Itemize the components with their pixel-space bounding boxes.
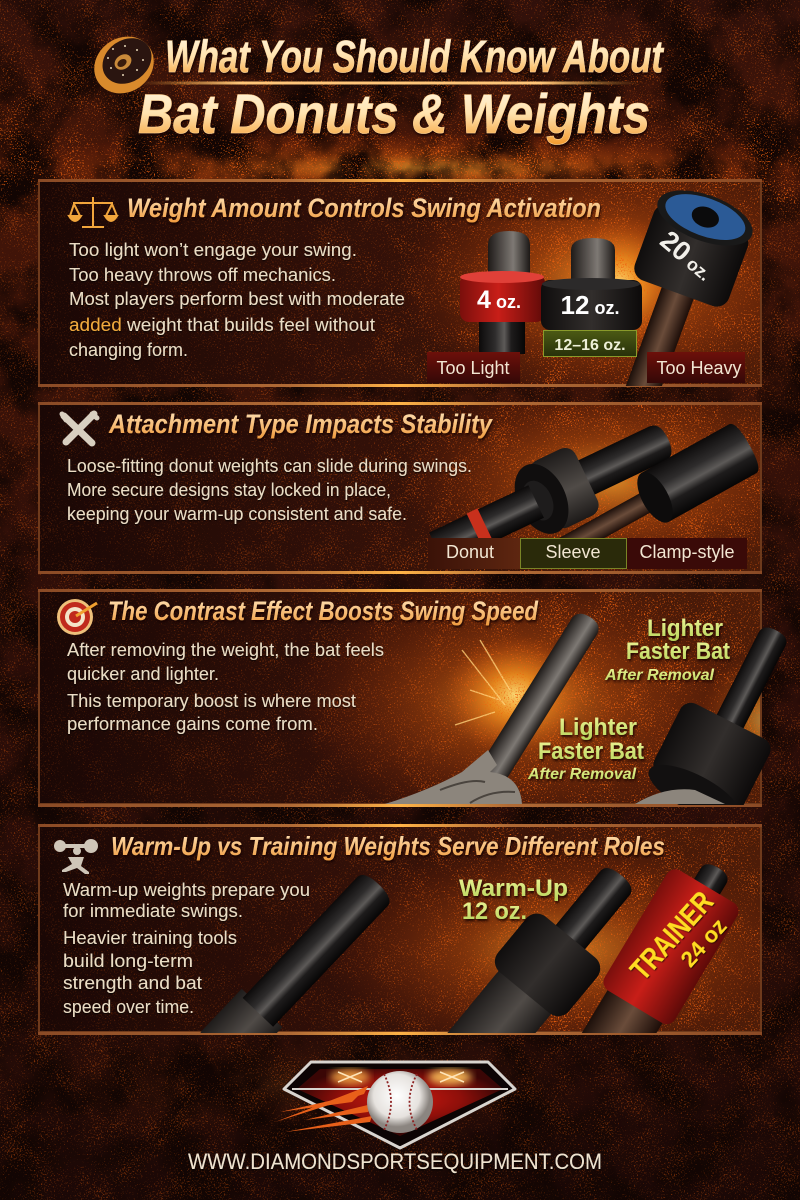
callout: lighter faster bat lower: Faster Bat xyxy=(538,738,644,765)
label: clamp-style: Clamp-style xyxy=(639,542,735,562)
panel: warm-up vs training xyxy=(38,824,762,1035)
body text: changing form. xyxy=(69,340,188,360)
icon: wrench and screwdriver xyxy=(62,414,97,443)
bat: 12 oz xyxy=(541,238,642,330)
heading: Warm-Up vs Training Weights Serve Different Roles xyxy=(111,831,665,861)
callout: lighter faster bat lower: Lighter xyxy=(559,714,637,741)
title line 1: What You Should Know About xyxy=(165,31,665,82)
bat: plain sleeve xyxy=(200,875,390,1033)
label: warm-up 12 oz: 12 oz. xyxy=(462,898,527,925)
heading: Weight Amount Controls Swing Activation xyxy=(127,193,601,223)
body text: performance gains come from. xyxy=(67,714,318,734)
label: too light: Too Light xyxy=(436,358,510,378)
body text: Loose-fitting donut weights can slide during swings. xyxy=(67,456,472,476)
panel: contrast effect xyxy=(38,589,786,807)
body text: speed over time. xyxy=(63,997,194,1017)
body text: Heavier training tools xyxy=(63,928,237,948)
callout: lighter faster bat lower xyxy=(527,714,644,783)
label: too heavy xyxy=(647,352,745,383)
bat: 12 oz: 12 oz. xyxy=(561,290,619,320)
icon: target xyxy=(57,599,97,635)
label: donut xyxy=(428,538,520,569)
body text xyxy=(67,640,384,734)
bat: 4 oz: 4 oz. xyxy=(477,286,521,314)
body text xyxy=(69,240,405,360)
body text: Warm-up weights prepare you xyxy=(63,880,310,900)
bat: trainer: 24 oz xyxy=(676,913,732,972)
label: warm-up 12 oz: Warm-Up xyxy=(459,875,568,902)
body text: More secure designs stay locked in place, xyxy=(67,480,391,500)
label: too heavy: Too Heavy xyxy=(656,358,742,378)
icon: donut xyxy=(83,25,165,105)
title block xyxy=(83,25,665,145)
body text: Too light won’t engage your swing. xyxy=(69,240,357,260)
bat: trainer: TRAINER xyxy=(624,885,720,987)
bat: 20 oz: 20 oz. xyxy=(654,225,720,286)
label: warm-up 12 oz xyxy=(459,875,568,925)
icon: weightlifter xyxy=(54,839,98,874)
bat: sleeve attachment xyxy=(559,424,758,538)
bat: donut with glove xyxy=(635,628,786,805)
bat: donut attachment xyxy=(429,426,672,538)
logo: diamond with baseball xyxy=(275,1062,515,1148)
footer url: WWW.DIAMONDSPORTSEQUIPMENT.COM xyxy=(188,1149,602,1174)
title underline xyxy=(140,82,640,84)
callout: lighter faster bat lower: After Removal xyxy=(527,766,637,783)
body text: keeping your warm-up consistent and safe. xyxy=(67,504,407,524)
callout: lighter faster bat upper xyxy=(604,615,730,684)
heading: The Contrast Effect Boosts Swing Speed xyxy=(108,596,538,626)
callout: lighter faster bat upper: Lighter xyxy=(647,615,723,642)
body text: Most players perform best with moderate xyxy=(69,289,405,309)
bat: 4 oz xyxy=(460,231,545,354)
speed streaks xyxy=(275,1086,372,1132)
body text: for immediate swings. xyxy=(63,901,243,921)
label: sleeve xyxy=(520,538,626,568)
body text: added weight that builds feel without xyxy=(69,315,375,335)
heading: Attachment Type Impacts Stability xyxy=(108,409,494,439)
icon: scales xyxy=(69,197,117,227)
label: 12-16 oz xyxy=(544,330,636,356)
body text: strength and bat xyxy=(63,973,202,993)
bat: plain bat with glove xyxy=(385,609,603,804)
title line 2: Bat Donuts & Weights xyxy=(138,82,650,145)
label: 12-16 oz: 12–16 oz. xyxy=(554,337,626,354)
bat: trainer xyxy=(582,864,738,1033)
body text: This temporary boost is where most xyxy=(67,691,356,711)
callout: lighter faster bat upper: After Removal xyxy=(604,667,715,684)
body text: build long-term xyxy=(63,951,193,971)
bat: 20 oz xyxy=(626,190,753,386)
label: clamp-style xyxy=(627,538,747,569)
body text: quicker and lighter. xyxy=(67,664,219,684)
panel: weight amount xyxy=(38,179,762,387)
baseball xyxy=(367,1071,433,1133)
body text: Too heavy throws off mechanics. xyxy=(69,265,336,285)
body text: After removing the weight, the bat feels xyxy=(67,640,384,660)
bat: warm-up donut xyxy=(447,868,632,1033)
panel: attachment type xyxy=(38,402,762,574)
label: too light xyxy=(427,352,520,383)
label: sleeve: Sleeve xyxy=(545,542,601,562)
body text xyxy=(63,880,310,1017)
body text xyxy=(67,456,472,524)
label: donut: Donut xyxy=(446,542,494,562)
callout: lighter faster bat upper: Faster Bat xyxy=(626,638,730,665)
